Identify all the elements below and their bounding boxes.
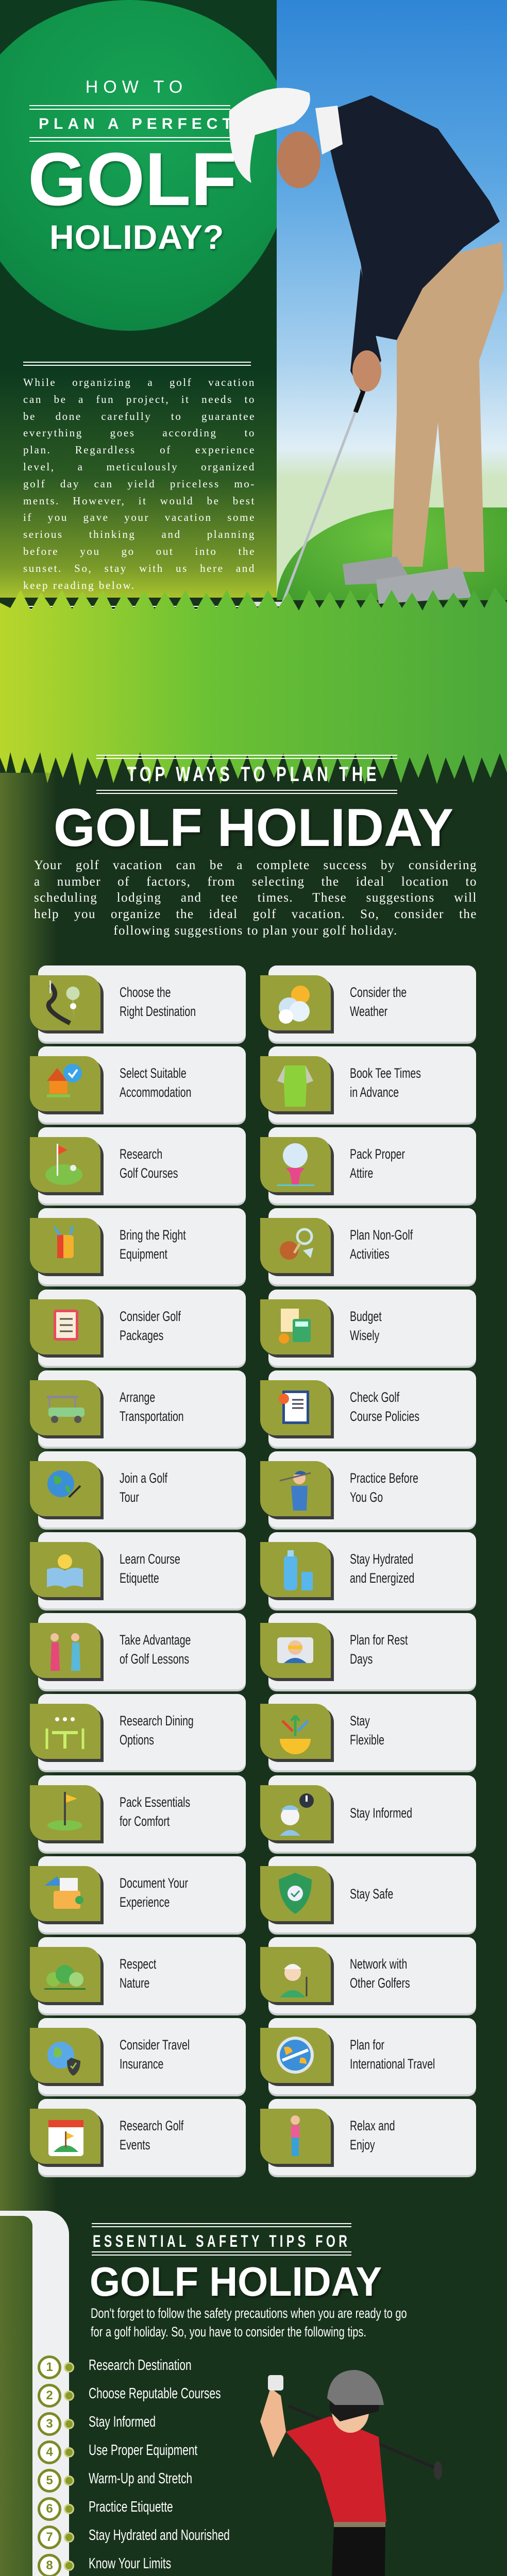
header: sky photo panel bbox=[277, 0, 507, 598]
icon: golfer person bbox=[260, 1947, 331, 2002]
label bbox=[120, 2037, 190, 2072]
card: Research Golf Events bbox=[38, 2099, 246, 2175]
intro paragraph: golf day can yield priceless mo- bbox=[23, 478, 256, 490]
section heading: top ways bbox=[54, 755, 453, 858]
label bbox=[120, 1470, 167, 1505]
label: Learn Course bbox=[120, 1551, 180, 1567]
label bbox=[350, 1470, 418, 1505]
item 7: Stay Hydrated and Nourished bbox=[89, 2527, 230, 2544]
card: Select Suitable Accommodation bbox=[38, 1046, 246, 1123]
intro paragraph: keep reading below. bbox=[23, 579, 136, 591]
card: Learn Course Etiquette bbox=[38, 1532, 246, 1608]
card: Document Your Experience bbox=[38, 1856, 246, 1933]
card: Plan Non-Golf Activities bbox=[268, 1208, 476, 1284]
label: Weather bbox=[350, 1004, 387, 1019]
item 4 bbox=[31, 2437, 247, 2466]
card: Practice Before You Go bbox=[268, 1451, 476, 1528]
label: of Golf Lessons bbox=[120, 1651, 189, 1667]
label bbox=[120, 1309, 181, 1343]
intro paragraph: plan. Regardless of experience bbox=[23, 444, 256, 456]
label bbox=[120, 1146, 178, 1181]
label: Tour bbox=[120, 1489, 139, 1505]
label: Other Golfers bbox=[350, 1975, 410, 1991]
label bbox=[350, 1065, 421, 1100]
item 1: 1 bbox=[46, 2360, 53, 2374]
label bbox=[120, 1227, 186, 1262]
icon: golfer swing bbox=[260, 1461, 331, 1516]
icon: calendar flag bbox=[30, 2109, 100, 2164]
label bbox=[350, 1227, 413, 1262]
safety intro text: Don't forget to follow the safety precautions when you are ready to go bbox=[91, 2306, 407, 2321]
intro paragraph: top ways: Your golf vacation can be a complete success by considering bbox=[34, 858, 477, 872]
decorative golf ball circle bbox=[0, 0, 294, 331]
icon: book with bulb bbox=[30, 1542, 100, 1597]
label bbox=[350, 1713, 384, 1748]
item 6: Practice Etiquette bbox=[89, 2499, 173, 2515]
label: Research bbox=[120, 1146, 162, 1162]
label: Stay Hydrated bbox=[350, 1551, 413, 1567]
grass band bbox=[0, 587, 507, 786]
heading: ESSENTIAL SAFETY TIPS FOR: ESSENTIAL SAFETY TIPS FOR bbox=[93, 2232, 350, 2250]
label: Document Your bbox=[120, 1875, 188, 1891]
label bbox=[120, 2118, 183, 2153]
item 2: Choose Reputable Courses bbox=[89, 2385, 221, 2402]
item 5 bbox=[31, 2465, 247, 2494]
card: Budget Wisely bbox=[268, 1290, 476, 1366]
item 7 bbox=[31, 2522, 247, 2551]
intro paragraph: if you gave your vacation some bbox=[23, 511, 256, 523]
icon: ball on tee bbox=[260, 1137, 331, 1192]
label bbox=[120, 1389, 184, 1424]
intro paragraph: level, a meticulously organized bbox=[23, 461, 256, 473]
label: Days bbox=[350, 1651, 373, 1667]
icon: polo shirt bbox=[260, 1056, 331, 1111]
item 7: 7 bbox=[46, 2530, 53, 2544]
label: Take Advantage bbox=[120, 1632, 191, 1648]
item 2 bbox=[31, 2380, 247, 2409]
card: Consider the Weather bbox=[268, 965, 476, 1042]
intro paragraph: sunset. So, stay with us here and bbox=[23, 562, 256, 574]
label bbox=[120, 1956, 157, 1991]
card: Bring the Right Equipment bbox=[38, 1208, 246, 1284]
label: Activities bbox=[350, 1246, 390, 1262]
label: Course Policies bbox=[350, 1409, 419, 1424]
label: Check Golf bbox=[350, 1389, 399, 1405]
icon: water bottle bbox=[260, 1542, 331, 1597]
intro paragraph: serious thinking and planning bbox=[23, 528, 256, 540]
label: Consider Travel bbox=[120, 2037, 190, 2053]
intro paragraph: top ways: following suggestions to plan your golf holiday. bbox=[113, 924, 398, 938]
label bbox=[350, 985, 407, 1019]
icon: package list bbox=[30, 1299, 100, 1354]
label bbox=[120, 1875, 188, 1910]
label: Insurance bbox=[120, 2056, 163, 2072]
item 4: 4 bbox=[46, 2445, 53, 2459]
label: Enjoy bbox=[350, 2137, 375, 2153]
intro paragraph: top ways: help you organize the ideal golf vacation. So, consider the bbox=[34, 907, 477, 921]
icon: flag bbox=[30, 1785, 100, 1840]
label: Relax and bbox=[350, 2118, 395, 2133]
card: Consider Travel Insurance bbox=[38, 2018, 246, 2094]
label: Events bbox=[120, 2137, 150, 2153]
intro paragraph: top ways: a number of factors, from selecting the ideal location to bbox=[34, 875, 477, 889]
label bbox=[350, 1146, 405, 1181]
intro paragraph: ments. However, it would be best bbox=[23, 495, 256, 507]
label: Stay Informed bbox=[350, 1805, 412, 1821]
label: Transportation bbox=[120, 1409, 184, 1424]
card: Pack Proper Attire bbox=[268, 1127, 476, 1204]
item 3 bbox=[31, 2409, 247, 2437]
label: Plan for Rest bbox=[350, 1632, 408, 1648]
label bbox=[120, 1713, 194, 1748]
intro paragraph: be done carefully to guarantee bbox=[23, 410, 256, 422]
item 1 bbox=[38, 2355, 192, 2379]
label bbox=[350, 2118, 395, 2153]
label: Golf Courses bbox=[120, 1165, 178, 1181]
label: Options bbox=[120, 1732, 154, 1748]
icon: calculator bbox=[260, 1299, 331, 1354]
card: Stay Hydrated and Energized bbox=[268, 1532, 476, 1608]
label: Research Dining bbox=[120, 1713, 194, 1728]
intro paragraph: before you go out into the bbox=[23, 545, 256, 557]
title block bbox=[28, 77, 237, 256]
header golfer illustration bbox=[229, 88, 504, 606]
icon: golf bag bbox=[30, 1218, 100, 1273]
card: Book Tee Times in Advance bbox=[268, 1046, 476, 1123]
label: Stay Safe bbox=[350, 1886, 393, 1902]
card: Consider Golf Packages bbox=[38, 1290, 246, 1366]
intro paragraph bbox=[23, 376, 256, 591]
label: Respect bbox=[120, 1956, 156, 1972]
label: Wisely bbox=[350, 1328, 379, 1343]
label: and Energized bbox=[350, 1570, 414, 1586]
label: Etiquette bbox=[120, 1570, 159, 1586]
safety golfer illustration bbox=[260, 2370, 442, 2576]
label bbox=[350, 1389, 419, 1424]
card: Research Dining Options bbox=[38, 1694, 246, 1770]
icon: trees bbox=[30, 1947, 100, 2002]
icon: elderly woman bbox=[260, 2109, 331, 2164]
icon: golf green bbox=[30, 1137, 100, 1192]
item 1: Research Destination bbox=[89, 2357, 192, 2374]
icon: golf cart bbox=[30, 1380, 100, 1435]
safety list bbox=[38, 2355, 230, 2576]
label: Practice Before bbox=[350, 1470, 418, 1486]
label bbox=[120, 985, 196, 1019]
safety intro text bbox=[91, 2306, 407, 2340]
icon: house bbox=[30, 1056, 100, 1111]
left olive edge bbox=[0, 773, 57, 2576]
title: GOLF: GOLF bbox=[28, 137, 237, 221]
label: Plan Non-Golf bbox=[350, 1227, 413, 1243]
label: Research Golf bbox=[120, 2118, 183, 2133]
item 6: 6 bbox=[46, 2502, 53, 2516]
label: Equipment bbox=[120, 1246, 167, 1262]
heading: GOLF HOLIDAY: GOLF HOLIDAY bbox=[90, 2259, 382, 2304]
icon: folder bbox=[30, 1866, 100, 1921]
card: Respect Nature bbox=[38, 1937, 246, 2013]
landscape scene bbox=[0, 2571, 507, 2576]
icon: gear arrows bbox=[260, 1704, 331, 1759]
label: Plan for bbox=[350, 2037, 384, 2053]
label: Select Suitable bbox=[120, 1065, 187, 1081]
intro paragraph: top ways bbox=[34, 858, 477, 938]
label: Accommodation bbox=[120, 1084, 191, 1100]
heading: TOP WAYS TO PLAN THE: TOP WAYS TO PLAN THE bbox=[127, 763, 380, 786]
label: Flexible bbox=[350, 1732, 384, 1748]
label: You Go bbox=[350, 1489, 383, 1505]
item 5: Warm-Up and Stretch bbox=[89, 2470, 192, 2487]
icon: sleeping bbox=[260, 1623, 331, 1678]
label: International Travel bbox=[350, 2056, 435, 2072]
icon: dining table bbox=[30, 1704, 100, 1759]
item 3: 3 bbox=[46, 2417, 53, 2431]
label bbox=[350, 1956, 410, 1991]
card: Stay Informed bbox=[268, 1775, 476, 1852]
card: Plan for Rest Days bbox=[268, 1613, 476, 1689]
safety intro text: for a golf holiday. So, you have to consider the following tips. bbox=[91, 2324, 366, 2340]
item 2: 2 bbox=[46, 2388, 53, 2402]
header: left green panel bbox=[0, 0, 277, 598]
card: Stay Flexible bbox=[268, 1694, 476, 1770]
card: Join a Golf Tour bbox=[38, 1451, 246, 1528]
icon: globe plane bbox=[260, 2028, 331, 2083]
item 8 bbox=[31, 2550, 247, 2576]
icon: person alert bbox=[260, 1785, 331, 1840]
icon: sports gear bbox=[260, 1218, 331, 1273]
icon: globe shield bbox=[30, 2028, 100, 2083]
item 3: Stay Informed bbox=[89, 2414, 156, 2430]
intro paragraph: top ways: scheduling lodging and tee times. These suggestions will bbox=[34, 891, 477, 905]
card: Arrange Transportation bbox=[38, 1370, 246, 1447]
label: Bring the Right bbox=[120, 1227, 186, 1243]
label bbox=[350, 1632, 408, 1667]
card: Relax and Enjoy bbox=[268, 2099, 476, 2175]
card: Choose the Right Destination bbox=[38, 965, 246, 1042]
label: Arrange bbox=[120, 1389, 155, 1405]
icon: weather bbox=[260, 975, 331, 1030]
label bbox=[350, 1309, 382, 1343]
label bbox=[350, 1551, 414, 1586]
title: PLAN A PERFECT: PLAN A PERFECT bbox=[39, 115, 236, 132]
item 4: Use Proper Equipment bbox=[89, 2442, 197, 2459]
label: Right Destination bbox=[120, 1004, 196, 1019]
title: HOW TO: HOW TO bbox=[86, 77, 188, 97]
item 8: Know Your Limits bbox=[89, 2555, 171, 2572]
card: Pack Essentials for Comfort bbox=[38, 1775, 246, 1852]
card: Stay Safe bbox=[268, 1856, 476, 1933]
label: Consider Golf bbox=[120, 1309, 181, 1324]
label: Pack Proper bbox=[350, 1146, 405, 1162]
card: Network with Other Golfers bbox=[268, 1937, 476, 2013]
label: Consider the bbox=[350, 985, 407, 1000]
section heading: safety tips bbox=[90, 2223, 382, 2304]
intro paragraph: everything goes according to bbox=[23, 427, 256, 439]
card: Plan for International Travel bbox=[268, 2018, 476, 2094]
label bbox=[120, 1632, 191, 1667]
card: Take Advantage of Golf Lessons bbox=[38, 1613, 246, 1689]
label bbox=[120, 1065, 191, 1100]
intro paragraph: can be a fun project, it needs to bbox=[23, 393, 256, 405]
label bbox=[120, 1551, 180, 1586]
icon: globe bbox=[30, 1461, 100, 1516]
card: Research Golf Courses bbox=[38, 1127, 246, 1204]
label bbox=[120, 1794, 190, 1829]
label: Attire bbox=[350, 1165, 373, 1181]
icon: two golfers bbox=[30, 1623, 100, 1678]
label: Budget bbox=[350, 1309, 382, 1324]
item 6 bbox=[31, 2494, 247, 2522]
label: Network with bbox=[350, 1956, 407, 1972]
label: in Advance bbox=[350, 1084, 399, 1100]
hill in photo bbox=[277, 507, 507, 600]
label: Nature bbox=[120, 1975, 149, 1991]
label: Stay bbox=[350, 1713, 370, 1728]
icon: clipboard bbox=[260, 1380, 331, 1435]
heading: GOLF HOLIDAY: GOLF HOLIDAY bbox=[54, 798, 453, 858]
label: Experience bbox=[120, 1894, 170, 1910]
title: HOLIDAY?: HOLIDAY? bbox=[49, 218, 224, 256]
safety bracket frame bbox=[0, 2211, 69, 2576]
label: for Comfort bbox=[120, 1814, 170, 1829]
item 5: 5 bbox=[46, 2473, 53, 2487]
icon: shield bbox=[260, 1866, 331, 1921]
label: Join a Golf bbox=[120, 1470, 167, 1486]
label: Pack Essentials bbox=[120, 1794, 190, 1810]
label bbox=[350, 2037, 435, 2072]
label: Choose the bbox=[120, 985, 171, 1000]
item 8: 8 bbox=[46, 2558, 53, 2572]
label: Book Tee Times bbox=[350, 1065, 421, 1081]
intro paragraph: While organizing a golf vacation bbox=[23, 376, 256, 388]
label: Packages bbox=[120, 1328, 163, 1343]
icon: destination path bbox=[30, 975, 100, 1030]
card: Check Golf Course Policies bbox=[268, 1370, 476, 1447]
